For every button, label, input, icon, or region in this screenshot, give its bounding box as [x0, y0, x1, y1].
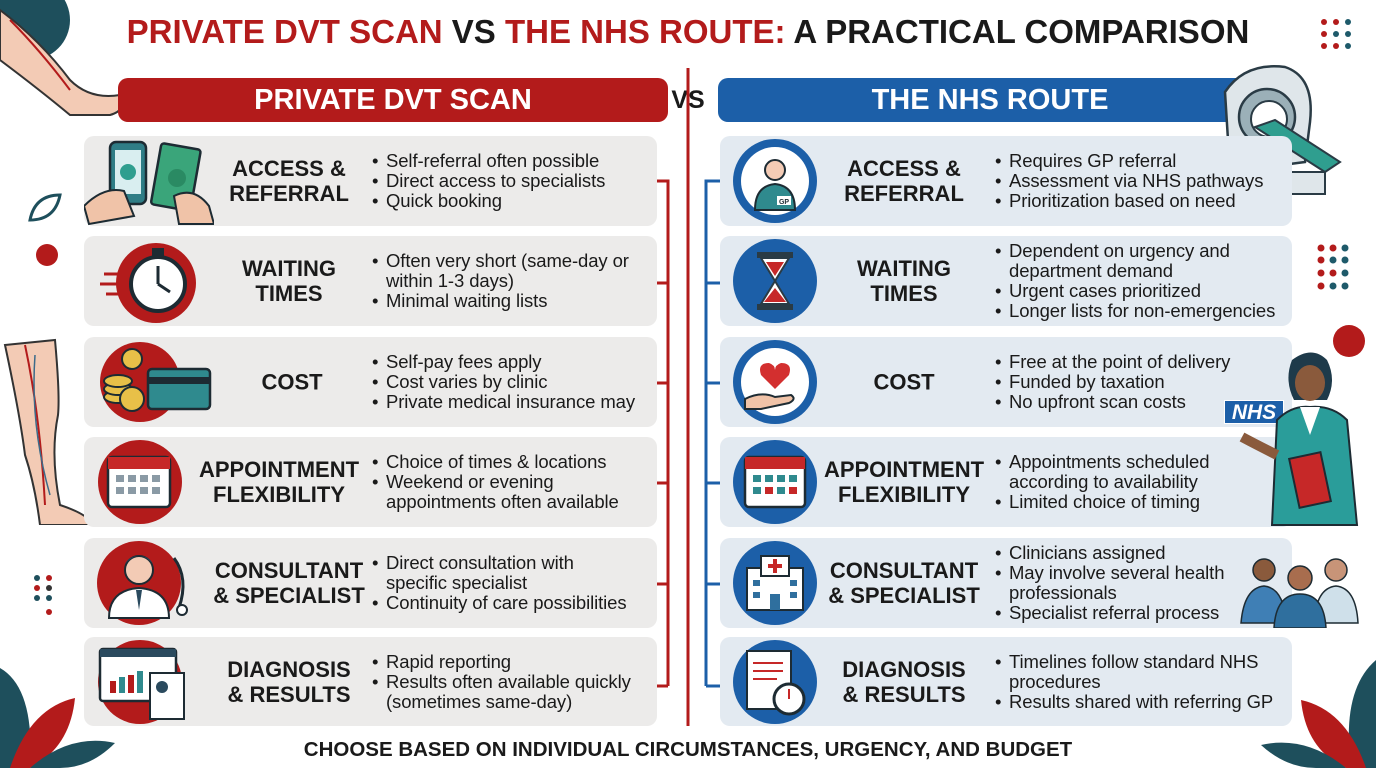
row: private appointment [84, 437, 657, 527]
bullets: procedures [1009, 670, 1101, 692]
bullets: Requires GP referral [1009, 150, 1176, 171]
bullets: appointments often available [386, 491, 619, 512]
bullets: Choice of times & locations [386, 451, 606, 472]
label: CONSULTANT [830, 558, 978, 583]
label: COST [261, 370, 323, 394]
header: NHS [718, 78, 1262, 122]
label [242, 256, 336, 306]
bullets: specific specialist [386, 572, 527, 593]
bullets [372, 451, 619, 512]
bullets: Appointments scheduled [1009, 451, 1209, 472]
decoration: leg left [4, 338, 88, 525]
label: ACCESS & [847, 156, 961, 181]
row: nhs access [720, 136, 1292, 226]
bullets: Assessment via NHS pathways [1009, 170, 1263, 191]
row: private consultant [84, 538, 657, 628]
icon: document & timer [731, 636, 821, 726]
bullets: Clinicians assigned [1009, 542, 1165, 563]
label: DIAGNOSIS [842, 656, 966, 682]
row: private access [84, 136, 657, 226]
row: private waiting [84, 236, 657, 326]
bullets: Private medical insurance may [386, 391, 635, 412]
bullets: Minimal waiting lists [386, 290, 547, 311]
bullets: professionals [1009, 582, 1117, 603]
icon: GP: GP [779, 199, 789, 206]
icon: calendar [98, 440, 182, 524]
bullets: (sometimes same-day) [386, 690, 572, 712]
bullets [372, 150, 605, 211]
panel: private rows [84, 136, 657, 726]
bullets [372, 250, 629, 311]
bullets: Weekend or evening [386, 471, 554, 492]
label [809, 656, 999, 706]
header: private: PRIVATE DVT SCAN [254, 84, 532, 116]
label: FLEXIBILITY [213, 482, 345, 507]
bullets: department demand [1009, 260, 1173, 281]
decoration: dots right [1318, 244, 1348, 290]
bullets [996, 150, 1263, 211]
bullets: Limited choice of timing [1009, 491, 1200, 512]
label: DIAGNOSIS [227, 656, 351, 682]
label [809, 558, 999, 608]
label: & SPECIALIST [213, 583, 365, 608]
label: CONSULTANT [215, 558, 363, 583]
bullets: May involve several health [1009, 562, 1224, 583]
decoration: leg top left [0, 0, 118, 116]
illustration: nurse [1232, 345, 1367, 530]
label [857, 256, 951, 306]
bullets: Cost varies by clinic [386, 371, 547, 392]
icon: coins & card [100, 342, 212, 422]
bullets: No upfront scan costs [1009, 391, 1186, 412]
label [844, 156, 964, 206]
icon: hospital [731, 538, 821, 628]
center divider [657, 68, 720, 726]
bullets: Often very short (same-day or [386, 250, 629, 271]
label: & RESULTS [842, 682, 966, 706]
row: private diagnosis [84, 637, 657, 726]
row: nhs appointment [720, 437, 1292, 527]
bullets [372, 351, 635, 412]
bullets: according to availability [1009, 471, 1198, 492]
bullets: Timelines follow standard NHS [1009, 650, 1258, 672]
bullets: Direct consultation with [386, 552, 574, 573]
header: private [118, 78, 668, 122]
label: APPOINTMENT [824, 457, 984, 482]
decoration: dots top right [1321, 19, 1351, 49]
row: nhs cost [720, 337, 1292, 427]
label: COST [873, 370, 935, 394]
bullets [372, 552, 626, 613]
bullets: Continuity of care possibilities [386, 592, 626, 613]
label: REFERRAL [229, 181, 349, 206]
icon: stopwatch [100, 243, 196, 323]
bullets: Results shared with referring GP [1009, 690, 1273, 712]
label [213, 558, 365, 608]
bullets: Results often available quickly [386, 670, 631, 692]
header: NHS: THE NHS ROUTE [872, 84, 1108, 116]
bullets [995, 543, 1224, 623]
bullets: Longer lists for non-emergencies [1009, 300, 1275, 321]
bullets: Self-pay fees apply [386, 351, 541, 372]
icon: doctor [97, 541, 188, 625]
bullets [996, 351, 1230, 412]
bullets: Dependent on urgency and [1009, 240, 1230, 261]
label: & SPECIALIST [828, 583, 980, 608]
NHS logo: NHS [1232, 401, 1276, 424]
bullets: Free at the point of delivery [1009, 351, 1230, 372]
bullets: Direct access to specialists [386, 170, 605, 191]
vs label: VS [671, 86, 705, 114]
illustration: staff group [1236, 548, 1364, 628]
panel: NHS rows [720, 136, 1292, 726]
label: APPOINTMENT [199, 457, 359, 482]
bullets: Quick booking [386, 190, 502, 211]
bullets [995, 452, 1209, 512]
bullets: Rapid reporting [386, 650, 511, 672]
decoration: small leaf & dot left [28, 194, 62, 266]
label: REFERRAL [844, 181, 964, 206]
icon: heart in hand [733, 340, 817, 424]
bullets: Self-referral often possible [386, 150, 599, 171]
icon: GP [733, 139, 817, 223]
row: nhs diagnosis [720, 637, 1292, 726]
bullets [372, 650, 631, 712]
decoration: leaves bottom left [0, 668, 115, 768]
row: nhs consultant [720, 538, 1292, 628]
decoration: dots left [34, 575, 52, 615]
label [229, 156, 349, 206]
icon: phone & cash [84, 140, 214, 226]
label [199, 457, 359, 507]
bullets: Funded by taxation [1009, 371, 1165, 392]
label: FLEXIBILITY [838, 482, 970, 507]
bullets: within 1-3 days) [386, 270, 514, 291]
label: WAITING [242, 256, 336, 281]
row: private cost [84, 337, 657, 427]
bullets: Urgent cases prioritized [1009, 280, 1201, 301]
label: TIMES [870, 281, 938, 306]
label: & RESULTS [227, 682, 351, 706]
label: WAITING [857, 256, 951, 281]
icon: hourglass [733, 239, 817, 323]
icon: monitor chart [98, 640, 185, 724]
title: PRIVATE DVT SCAN VS THE NHS ROUTE: A PRACTICAL COMPARISON [127, 13, 1249, 50]
scanner illustration [1224, 65, 1342, 195]
label: ACCESS & [232, 156, 346, 181]
footer: CHOOSE BASED ON INDIVIDUAL CIRCUMSTANCES, URGENCY, AND BUDGET [304, 738, 1072, 761]
label [227, 656, 351, 706]
row: nhs waiting [720, 236, 1292, 326]
decoration: red dot right [1333, 325, 1365, 357]
bullets: Prioritization based on need [1009, 190, 1236, 211]
label [824, 457, 984, 507]
bullets [995, 652, 1273, 712]
bullets [996, 240, 1275, 321]
bullets: Specialist referral process [1009, 602, 1219, 623]
icon: calendar [733, 440, 817, 524]
decoration: leaves bottom right [1261, 660, 1376, 768]
label: TIMES [255, 281, 323, 306]
